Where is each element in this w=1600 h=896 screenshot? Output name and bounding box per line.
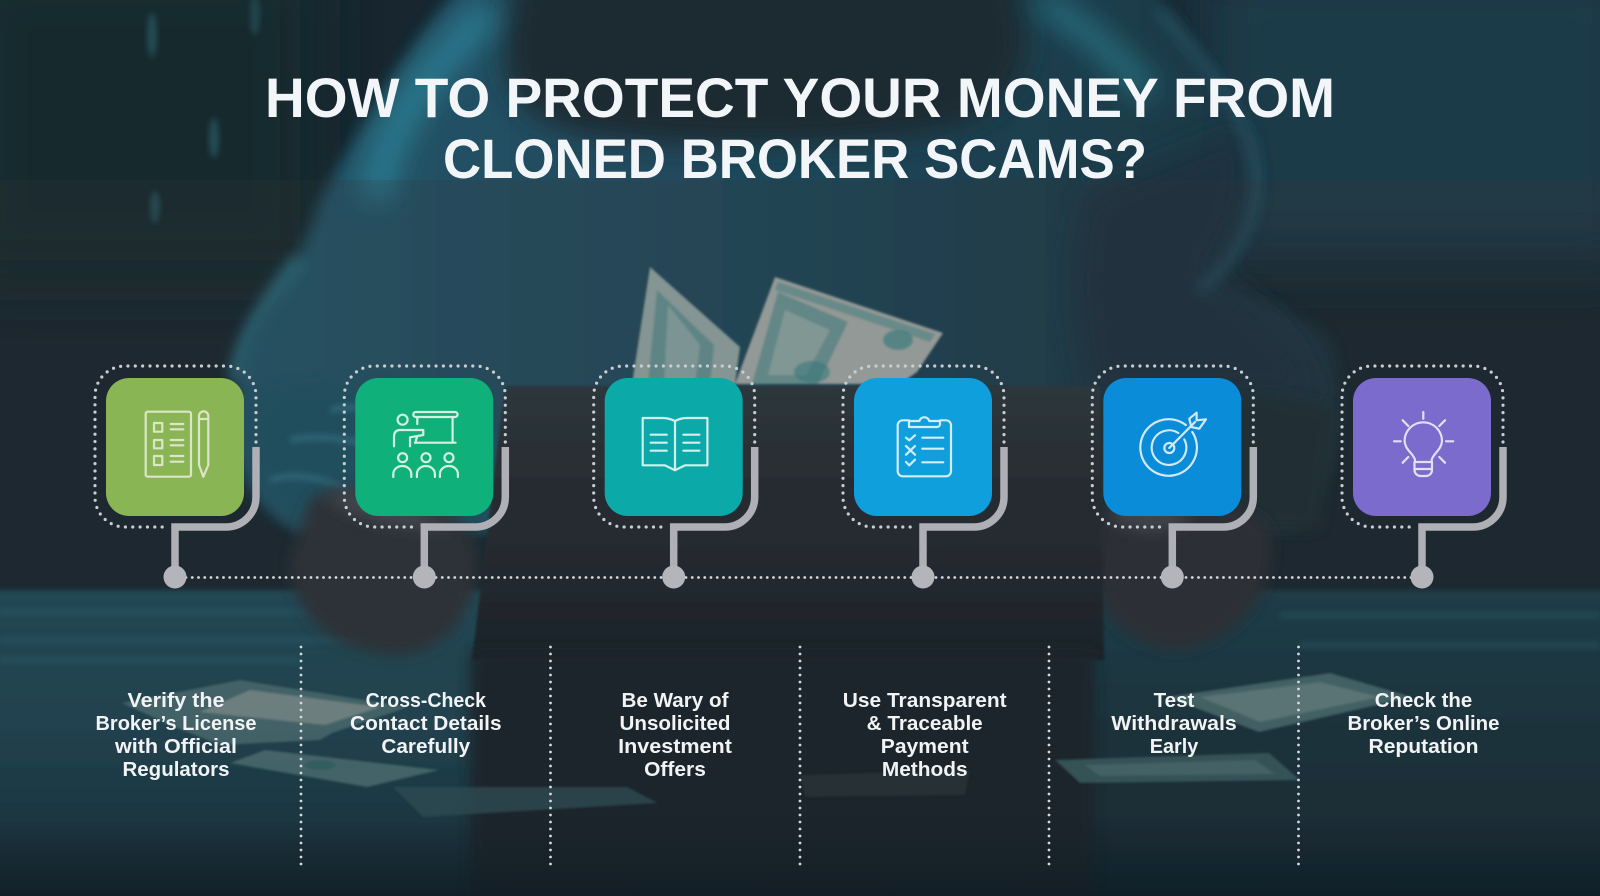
label: online reputation: Broker’s Online [1348,713,1500,735]
step 3: wary of unsolicited offers [594,366,755,588]
label: online reputation: Reputation [1368,736,1478,758]
label: transparent methods [843,690,1007,781]
label: be wary: Offers [644,759,706,781]
step 4: transparent payment methods [843,366,1004,588]
label: cross-check: Contact Details [350,713,502,735]
icon: presenter and audience [393,412,458,477]
label: be wary: Investment [618,736,732,758]
label: online reputation [1348,690,1500,758]
label: transparent methods: Methods [882,759,968,781]
label: verify license: Broker’s License [96,713,256,735]
icon: clipboard checklist [898,417,951,476]
label: test withdrawals: Withdrawals [1111,713,1237,735]
label: cross-check [350,690,502,758]
label: verify license: Regulators [122,759,230,781]
title: HOW TO PROTECT YOUR MONEY FROM [265,66,1335,129]
icon: checklist and pencil [146,411,208,477]
icon: target with arrow [1140,413,1206,476]
label: transparent methods: Use Transparent [843,690,1007,712]
timeline dotted line [186,576,1412,579]
label: test withdrawals [1111,690,1237,758]
icon: open book [643,418,707,470]
title [265,66,1335,190]
title: CLONED BROKER SCAMS? [443,127,1147,190]
label: be wary: Be Wary of [622,690,729,712]
step 1: verify license [95,366,256,588]
dollar bills above laptop [632,267,943,384]
label: verify license [96,690,256,781]
dollar bills on table [122,673,1412,817]
label: cross-check: Cross-Check [366,690,487,712]
label: test withdrawals: Early [1150,736,1199,758]
step 5: test withdrawals [1092,366,1253,588]
label: be wary: Unsolicited [620,713,730,735]
column dividers [301,647,1298,865]
icon: light bulb [1394,412,1453,476]
label: online reputation: Check the [1375,690,1472,712]
label: be wary [618,690,732,781]
label: test withdrawals: Test [1154,690,1195,712]
label: cross-check: Carefully [381,736,471,758]
label: verify license: with Official [114,736,237,758]
label: transparent methods: & Traceable [867,713,983,735]
step 6: check online reputation [1342,366,1503,588]
label: transparent methods: Payment [881,736,969,758]
step 2: cross-check contact details [344,366,505,588]
label: verify license: Verify the [128,690,224,712]
